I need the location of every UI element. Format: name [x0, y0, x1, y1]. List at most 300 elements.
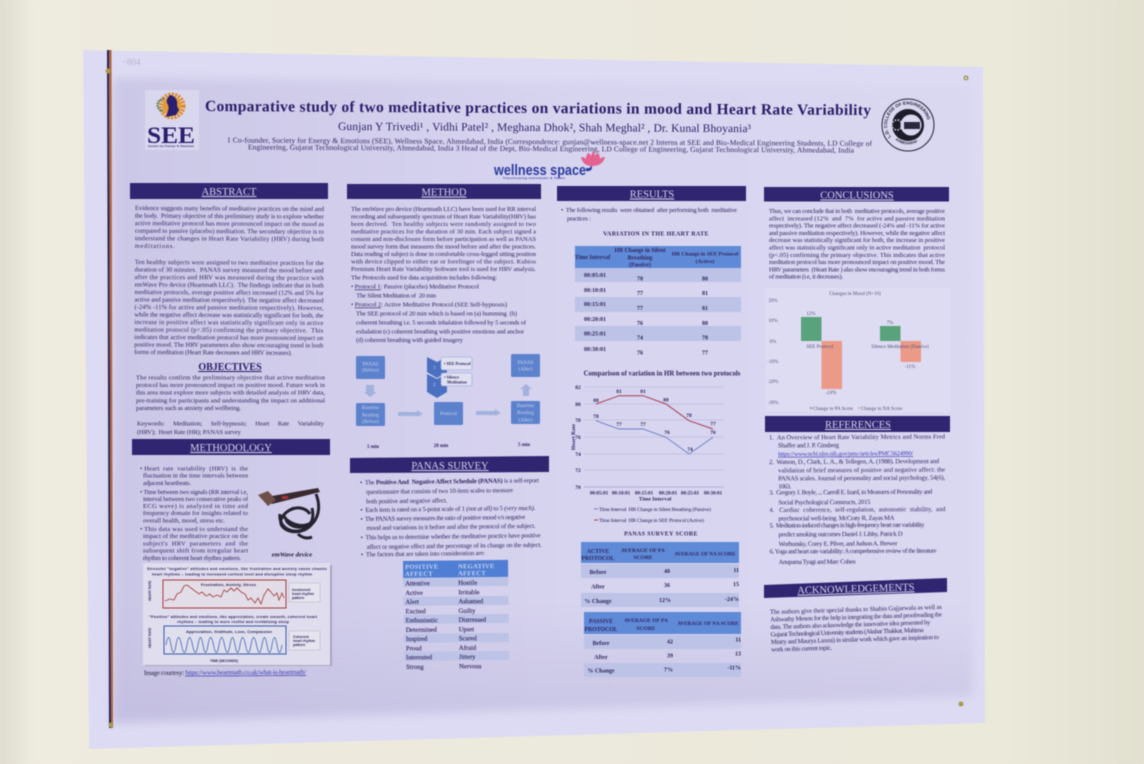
methodology bullets: • This data was used to understand the [140, 526, 248, 533]
chart: comparison of variation in HR: 00:20:01 [659, 492, 678, 496]
method text: meditative practices for the duration of 30 min. Each subject signed a [351, 228, 536, 236]
panel: acknowledgements [764, 578, 947, 653]
acknowledgements text: Ashwathy Menon for the help in integrating the data and proofreading the [770, 611, 942, 623]
table: passive protocol: AVERAGE OF PA [624, 618, 668, 624]
table: active protocol: 15 [733, 582, 739, 588]
heading: conclusions: CONCLUSIONS [820, 190, 894, 202]
PANAS bullets: • The PANAS survey measures the ratio of positive mood v/s negative [360, 514, 526, 523]
method text: The Protocols used for data acquisition includes following: [351, 274, 497, 282]
chart: changes in mood: -11% [905, 365, 915, 370]
flow diagram: protocol: 5 min [518, 443, 530, 448]
flow diagram: protocol: 5 min [367, 445, 379, 450]
references list: 1063. [778, 483, 792, 490]
table: positive and negative affect: Ashamed [458, 598, 484, 605]
abstract text: increase in positive affect was statistically significant only in active [134, 319, 324, 327]
chart: comparison of variation in HR: 81 [616, 389, 622, 395]
chart: changes in mood: Changes in Mood (N=10) [829, 292, 881, 297]
table: passive protocol: Before [593, 641, 610, 647]
heading: method [347, 184, 541, 199]
chart: changes in mood: -20% [768, 380, 778, 385]
objectives text: parameters such as anxiety and wellbeing. [136, 405, 241, 412]
table: active protocol: 40 [664, 569, 670, 575]
chart: changes in mood: -24% [826, 391, 836, 396]
heading: variation in heart rate: VARIATION IN THE HEART RATE [603, 232, 709, 238]
methodology bullets: fluctuation in the time intervals between [143, 472, 249, 480]
title: Comparative study of two meditative practices on variations in mood and Heart Rate Variability [205, 98, 871, 119]
chart: comparison of variation in HR: 77 [710, 422, 716, 428]
table: variation in the heart rate: 81 [702, 291, 708, 297]
figure: heart rhythm patterns: pattern [292, 596, 304, 600]
chart: comparison of variation in HR: 77 [616, 422, 622, 428]
chart: comparison of variation in HR: 80 [575, 402, 581, 408]
method text [351, 206, 537, 344]
table: variation in the heart rate: 00:05:01 [584, 273, 606, 279]
objectives text: (HRV); Heart Rate (HR); PANAS survey [137, 429, 242, 436]
table: passive protocol: % Change [587, 668, 615, 674]
references list: 2. Watson, D., Clark, L. A., & Tellegen, A. (1988). Development and [769, 458, 940, 466]
table: active protocol: 12% [659, 598, 671, 604]
table: positive and negative affect: Scared [459, 635, 477, 642]
figure: heart rhythm patterns: heart rhythm [292, 592, 314, 596]
abstract text: emWave Pro device (Heartmath LLC). The findings indicate that in both [135, 281, 324, 289]
table: positive and negative affect: Interested [406, 654, 433, 661]
PANAS bullets: questionnaire that consists of two 10-item scales to measure [366, 487, 513, 496]
heading: acknowledgements [764, 578, 947, 598]
flow diagram: protocol: • Silence [444, 374, 459, 380]
abstract text: forms of meditation (Heart Rate decreases and HRV increases). [134, 349, 293, 357]
table: variation in the heart rate: (Passive) [629, 262, 651, 268]
table: positive and negative affect: AFFECT [458, 570, 486, 577]
abstract text [134, 205, 325, 357]
objectives text: this area must explore more subjects with detailed analysis of HRV data, [136, 390, 325, 397]
chart: changes in mood: 10% [768, 319, 778, 324]
flow diagram: protocol: Reading [362, 414, 379, 418]
objectives text: protocol has more pronounced impact on positive mood. Future work in [136, 382, 326, 389]
table: positive and negative affect: Nervous [459, 663, 482, 670]
table: positive and negative affect: Excited [405, 608, 426, 615]
table: active protocol: % Change [584, 599, 612, 605]
panel: results [557, 186, 746, 677]
flow diagram: protocol: PANAS [518, 361, 534, 366]
table: passive protocol: After [594, 655, 608, 661]
abstract text: meditations. [135, 243, 175, 250]
flow diagram: protocol: • SEE Protocol [444, 361, 471, 366]
figure: heart rhythm patterns: rhythms – leading to more restful and revitalizing sleep [177, 620, 290, 624]
table: positive and negative affect: AFFECT [405, 571, 433, 578]
abstract text: Evidence suggests many benefits of meditative practices on the mind and [135, 205, 325, 213]
table: positive and negative affect: Enthusiastic [406, 617, 438, 624]
method text: recording and subsequently spectrum of Heart Rate Variability(HRV) has [351, 214, 536, 220]
flow diagram: protocol: 1 [433, 366, 436, 371]
table: positive and negative affect: Proud [406, 645, 422, 652]
references list: predict smoking outcomes Daniel J. Libby, Patrick D [778, 531, 903, 538]
acknowledgements text: data. The authors also acknowledge the innovative idea presented by [770, 619, 931, 631]
results intro [561, 207, 737, 222]
flow diagram: protocol: Baseline [362, 406, 380, 411]
poster sheet [83, 50, 985, 749]
chart: comparison of variation in HR: 76 [710, 430, 716, 436]
acknowledgements text: The authors give their special thanks to Shabin Gajjarwala as well as [770, 604, 942, 616]
figure: heart rhythm patterns: "Positive" attitudes and emotions, like appreciation, create smooth, coherent heart [149, 615, 318, 619]
table: positive and negative affect: Active [405, 590, 423, 597]
table: active protocol: AVERAGE OF PA [621, 548, 665, 554]
heading: PANAS survey: PANAS SURVEY [411, 461, 489, 472]
method text: • Protocol 2: Active Meditative Protocol (SEE Self-hypnosis) [351, 302, 507, 308]
references list: Social Psychological Constructs, 2015 [778, 499, 870, 506]
methodology bullets: • Heart rate variability (HRV) is the [140, 466, 248, 472]
references list: psychosocial well-being. McCraty R, Zayas MA [778, 515, 895, 522]
objectives text: The results confirm the preliminary objective that active meditation [136, 374, 326, 382]
methodology bullets: adjacent heartbeats. [143, 480, 191, 487]
table: passive protocol: -11% [727, 666, 741, 672]
abstract text: meditation protocol (p<.05) confirming the primary objective. This [134, 326, 324, 334]
caption: emWave device: emWave device [272, 552, 312, 558]
table: positive and negative affect: Determined [406, 627, 438, 634]
chart: comparison of variation in HR: 74 [575, 452, 581, 458]
table: positive and negative affect: Guilty [458, 608, 476, 615]
flow diagram: protocol: (Before) [362, 368, 379, 374]
table: positive and negative affect: NEGATIVE [458, 563, 495, 570]
abstract text: positive mood. The HRV parameters also show encouraging trend in both [134, 341, 324, 349]
flow diagram: protocol: (After) [519, 418, 533, 424]
figure: heart rhythm patterns: Stressful "negative" attitudes and emotions, like frustration and anxiety cause chaotic [147, 567, 327, 571]
table: variation in the heart rate: 00:25:01 [584, 332, 606, 338]
methodology bullets: interval between two consecutive peaks of [143, 496, 249, 503]
table: variation in the heart rate: 00:10:01 [584, 288, 606, 294]
heading: results: RESULTS [630, 190, 674, 200]
references list: Anupama Tyagi and Marc Cohen [779, 559, 856, 566]
chart: changes in mood: -30% [768, 401, 778, 406]
conclusions text: and passive meditation respectively). However, while the negative affect [769, 230, 945, 237]
chart: comparison of variation in HR: 76 [664, 430, 670, 436]
poster sheet: ~804 [122, 57, 141, 67]
table: variation in the heart rate: Breathing [628, 256, 652, 262]
panel: methodology [132, 439, 332, 677]
chart: comparison of variation in HR: 72 [575, 468, 581, 474]
conclusions text [769, 208, 946, 281]
heading: results [557, 186, 746, 201]
results intro: practices : [567, 216, 591, 222]
abstract text: Ten healthy subjects were assigned to two meditative practices for the [135, 259, 324, 267]
abstract text: duration of 30 minutes. PANAS survey measured the mood before and [135, 266, 324, 274]
figure: heart rhythm patterns: Frustration, Anxiety, Stress [201, 582, 257, 587]
table: positive and negative affect: Distressed [459, 617, 487, 624]
table: variation in the heart rate: 78 [702, 336, 708, 342]
acknowledgements text [770, 604, 944, 653]
abstract text: active meditative protocol has more pronounced impact on the mood as [135, 220, 324, 228]
chart: comparison of variation in HR: 80 [663, 398, 669, 404]
figure: heart rhythm patterns: TIME (SECONDS) [210, 659, 238, 663]
chart: changes in mood: 0% [770, 340, 776, 345]
method text: mood survey form that measures the mood before and after the practices. [351, 244, 536, 250]
conclusions text: of meditation (i.e, it decreases). [769, 274, 843, 281]
chart: comparison of variation in HR: 74 [687, 447, 693, 453]
table: variation in the heart rate: 77 [637, 291, 643, 297]
chart: changes in mood: SEE Protocol [806, 345, 834, 350]
chart: changes in mood: Change in PA Score [813, 407, 854, 412]
heading: acknowledgements: ACKNOWLEDGEMENTS [797, 582, 915, 597]
panel: conclusions [764, 187, 950, 412]
references list: validation of brief measures of positive and negative affect: the [778, 467, 945, 474]
chart: changes in mood: 20% [768, 299, 778, 304]
table: active protocol: 11 [733, 568, 739, 574]
table: positive and negative affect: Attentive [405, 580, 430, 587]
table: active protocol: SCORE [634, 555, 653, 561]
flow diagram: protocol: (After) [519, 368, 533, 372]
references list: 5. Meditation-induced changes in high-frequency heart rate variability [769, 522, 925, 529]
method text: coherent breathing i.e. 5 seconds inhalation followed by 5 seconds of [356, 320, 527, 326]
chart: comparison of variation in HR: 70 [575, 485, 581, 491]
flow diagram: protocol: Reading [517, 411, 534, 416]
methodology bullets [140, 466, 249, 562]
table: passive protocol: PROTOCOL [584, 627, 618, 633]
table: variation in the heart rate: 77 [702, 350, 708, 356]
figure: heart rhythm patterns: Coherent [293, 635, 310, 639]
chart: comparison of variation in HR [571, 370, 741, 524]
references list: PANAS scales. Journal of personality and social psychology, 54(6), [778, 475, 946, 482]
conclusions text: decrease was statistically significant for both, the increase in positive [769, 237, 945, 244]
flow diagram: protocol: 20 min [434, 444, 449, 449]
chart: changes in mood: Change in NA Score [861, 407, 903, 412]
acknowledgements text: Gujarat Technological University students (Akshar Thakkar, Mahima [771, 627, 924, 638]
abstract text: after the practices and HRV was measured during the practice with [135, 274, 324, 282]
chart: comparison of variation in HR: 80 [593, 398, 599, 404]
method text: exhalation (c) coherent breathing with positive emotions and anchor [356, 328, 525, 336]
table: active protocol: After [591, 584, 605, 590]
table: positive and negative affect: Irritable [458, 589, 480, 596]
table: passive protocol: 13 [735, 652, 741, 658]
method text: The SEE protocol of 20 min which is based on (a) humming (b) [356, 310, 517, 318]
conclusions text: affect was statistically significant only in active meditation protocol [769, 244, 945, 252]
table: variation in the heart rate: 81 [702, 306, 708, 312]
chart: comparison of variation in HR: 78 [575, 418, 581, 424]
figure: heart rhythm patterns: HEART RATE [148, 581, 152, 601]
logo: wellness space: wellness space [493, 163, 586, 179]
table: variation in the heart rate [575, 246, 741, 356]
photo: emWave device [258, 488, 320, 538]
methodology bullets: subject's HRV parameters and the [143, 540, 248, 548]
logo: wellness space: Transforming individuals & Teams [503, 176, 565, 180]
table: variation in the heart rate: 76 [637, 350, 643, 356]
logo: SEE society: SEE [147, 123, 195, 148]
method text: been derived. Ten healthy subjects were randomly assigned to two [351, 221, 536, 228]
chart: comparison of variation in HR: 00:05:01 [590, 492, 609, 496]
logo: SEE society: Society for Energy & Emotions [148, 144, 195, 148]
heading: objectives: OBJECTIVES [198, 362, 262, 373]
table: positive and negative affect: Alert [405, 599, 419, 606]
table: passive protocol: 11 [735, 638, 741, 644]
table: active protocol [581, 542, 739, 607]
chart: comparison of variation in HR: 00:15:01 [635, 492, 654, 496]
abstract text: meditative protocols, average positive affect increased (12% and 5% for [135, 289, 324, 297]
table: positive and negative affect: Hostile [458, 580, 477, 587]
PANAS bullets: • The Positive And Negative Affect Schedule (PANAS) is a self-report [360, 477, 539, 486]
affiliations: 1 Co-founder, Society for Energy & Emotions (SEE), Wellness Space, Ahmedabad, India (Correspondence: gunjan@wellness-space.net 2 Interns at SEE and Bio-Medical Engineering Students, LD College of [227, 136, 873, 148]
PANAS bullets: both positive and negative affect. [366, 497, 448, 505]
table: passive protocol [584, 612, 741, 677]
logo: LD College of Engineering: L.D. COLLEGE OF ENGINEERING [883, 100, 931, 139]
table: variation in the heart rate: 00:20:01 [584, 317, 606, 323]
table: active protocol: ACTIVE [587, 549, 609, 555]
table: positive and negative affect: Upset [459, 626, 474, 633]
heading: references: REFERENCES [825, 420, 891, 431]
conclusions text: meditation protocol has more pronounced impact on positive mood. The [769, 259, 945, 266]
conclusions text: HRV parameters (Heart Rate ) also show encouraging trend in both forms [769, 266, 945, 273]
heading: abstract [130, 183, 328, 199]
references list: 1. An Overview of Heart Rate Variability Metrics and Norms Fred [769, 434, 946, 441]
flow diagram: protocol: PANAS [363, 362, 379, 368]
table: variation in the heart rate: Time Interval [575, 255, 611, 261]
chart: comparison of variation in HR: 78 [593, 414, 599, 420]
authors: Gunjan Y Trivedi¹ , Vidhi Patel² , Meghana Dhok², Shah Meghal² , Dr. Kunal Bhoyania³ [338, 121, 752, 135]
method text: The Silent Meditation of 20 min [355, 292, 437, 300]
chart: changes in mood: -10% [768, 360, 778, 365]
references list: https://www.ncbi.nlm.nih.gov/pmc/articles/PMC5624990/ [778, 450, 913, 458]
flow diagram: protocol: Baseline [517, 404, 535, 409]
references list [769, 434, 946, 566]
conclusions text: respectively). The negative affect decreased (-24% and -11% for active [769, 223, 945, 230]
panel: method [347, 184, 541, 450]
methodology bullets: • Time between two signals (RR interval i.e, [140, 489, 248, 496]
table: active protocol: AVERAGE OF NA SCORE [674, 552, 736, 558]
panel: references [765, 416, 950, 566]
chart: comparison of variation in HR: Comparison of variation in HR between two protocols [584, 370, 741, 378]
affiliations: Engineering, Gujarat Technological University, Ahmedabad, India 3 Head of the Dept, Bio-Medical Engineering, LD College of Engineering, Gujarat Technological University, Ahmedabad, India [248, 143, 855, 155]
chart: comparison of variation in HR: 00:25:01 [681, 492, 700, 496]
flow diagram: protocol: (Before) [362, 420, 379, 425]
table: variation in the heart rate: 80 [702, 276, 708, 282]
figure: heart rhythm patterns: Appreciation, Gratitude, Love, Compassion [186, 629, 273, 634]
flow diagram: protocol: 2 [433, 383, 436, 388]
table: positive and negative affect: Afraid [459, 645, 477, 652]
abstract text: indicates that active meditation protocol has more pronounced impact on [134, 334, 324, 342]
table: variation in the heart rate: HR Change in SEE Protocol [672, 252, 739, 258]
table: variation in the heart rate: 76 [637, 321, 643, 327]
heading: method: METHOD [422, 188, 467, 198]
heading: abstract: ABSTRACT [202, 187, 257, 198]
table: positive and negative affect: Strong [406, 664, 424, 671]
conclusions text: affect increased (12% and 7% for active and passive meditation [769, 215, 946, 222]
chart: comparison of variation in HR: 00:30:01 [704, 492, 723, 496]
heading: conclusions [764, 187, 949, 202]
PANAS bullets [360, 477, 542, 558]
objectives text: pre-training for participants and understanding the impact on additional [136, 397, 325, 404]
abstract text: active and passive meditation respectively). The negative affect decreased [134, 296, 324, 304]
figure: heart rhythm patterns: heart rhythms – leading to increased cortisol level and disruptive sleep rhythm [152, 572, 313, 576]
method text: Data reading of subject is done in comfortable cross-legged sitting position [351, 251, 537, 258]
method text: consent and non-disclosure form before participation as well as PANAS [351, 236, 536, 243]
method text: with device clipped to either ear or forefinger of the subject. Kubios [351, 258, 536, 266]
method text: • Protocol 1: Passive (placebo) Meditative Protocol [351, 284, 479, 290]
figure: heart rhythm patterns: pattern [293, 643, 305, 647]
methodology bullets: ECG wave) is analyzed in time and [143, 503, 249, 510]
panel: PANAS survey [350, 456, 549, 671]
table: variation in the heart rate: 00:30:01 [584, 347, 606, 353]
chart: comparison of variation in HR: Heart Rate [571, 423, 577, 450]
table: passive protocol: AVERAGE OF NA SCORE [677, 621, 739, 627]
chart: comparison of variation in HR: Time Interval HR Change in SEE Protocol (Active) [599, 517, 704, 524]
method text: The emWave pro device (Heartmath LLC) have been used for RR interval [351, 206, 536, 213]
chart: comparison of variation in HR: 00:10:01 [612, 492, 631, 496]
abstract text: understand the changes in Heart Rate Variability (HRV) during both [135, 235, 325, 243]
chart: comparison of variation in HR: 81 [640, 389, 646, 395]
chart: changes in mood: 12% [806, 312, 816, 317]
table: positive and negative affect [403, 560, 509, 671]
methodology bullets: overall health, mood, stress etc. [143, 518, 225, 524]
abstract text: the body. Primary objective of this preliminary study is to explore whether [135, 213, 325, 221]
image courtesy: Image courtesy: https://www.heartmath.co.uk/what-is-heartmath/ [144, 669, 306, 677]
table: passive protocol: 39 [667, 654, 673, 660]
logo: wellness space [493, 151, 605, 180]
table: passive protocol: 42 [667, 640, 673, 646]
chart: changes in mood: Silence Meditation (Passive) [871, 345, 929, 350]
methodology bullets: impact of the meditative practice on the [143, 533, 248, 540]
logo: SEE society [145, 90, 199, 150]
abstract text: while the negative affect decrease was statistically significant for both, the [134, 311, 324, 319]
methodology bullets: frequency domain for insights related to [143, 510, 248, 517]
table: variation in the heart rate: 74 [637, 336, 643, 342]
table: active protocol: -24% [725, 597, 739, 603]
references list: 4. Cardiac coherence, self-regulation, autonomic stability, and [769, 506, 946, 514]
heading: PANAS survey [350, 456, 549, 473]
PANAS bullets: mood and variations in it before and after the protocol of the subject. [367, 523, 536, 532]
results intro: • The following results were obtained after performing both meditative [561, 207, 737, 214]
flow diagram: protocol: Protocol [440, 412, 458, 417]
table: passive protocol: 7% [664, 668, 673, 674]
figure: heart rhythm patterns: heart rhythm [293, 639, 315, 643]
method text: (d) coherent breathing with guided imagery [356, 337, 464, 344]
PANAS bullets: affect or negative effect and the percentage of its change on the subject. [367, 542, 542, 551]
abstract text: compared to passive (placebo) meditation. The secondary objective is to [135, 228, 324, 236]
table: active protocol: PROTOCOL [581, 556, 615, 562]
acknowledgements text: work on this current topic. [771, 645, 833, 653]
objectives text [136, 374, 326, 436]
table: variation in the heart rate: HR Change in Silent [614, 248, 666, 254]
flow diagram: protocol [356, 354, 540, 450]
acknowledgements text: Mistry and Maurya Laxmi) in similar work which gave an inspiration to [771, 634, 939, 646]
heading: references [765, 416, 950, 432]
PANAS bullets: • The factors that are taken into consideration are: [361, 550, 485, 558]
chart: comparison of variation in HR: Time Interval HR Change in Silent Breathing (Passive) [599, 506, 711, 513]
flow diagram: protocol: Meditation [447, 380, 467, 384]
PANAS bullets: • Each item is rated on a 5-point scale of 1 (not at all) to 5 (very much). [360, 505, 536, 514]
conclusions text: (p<.05) confirming the primary objective. This indicates that active [769, 252, 945, 259]
references list: 3. Gregory J. Boyle, ... Carroll E. Izard, in Measures of Personality and [769, 489, 933, 496]
heading: PANAS survey score: PANAS SURVEY SCORE [624, 532, 698, 538]
references list: Shaffer and J. P. Ginsberg [778, 442, 840, 449]
table: positive and negative affect: POSITIVE [405, 564, 439, 571]
figure: heart rhythm patterns [143, 563, 332, 666]
objectives text: Keywords: Meditation; Self-hypnosis; Heart Rate Variability [137, 420, 325, 428]
heading: methodology [132, 439, 330, 455]
panel: abstract [130, 183, 328, 357]
table: active protocol: Before [590, 570, 607, 576]
logo: LD College of Engineering: AHMEDABAD [895, 138, 918, 145]
affiliations [227, 136, 873, 155]
methodology bullets: subsequent shift from irregular heart [143, 548, 248, 554]
table: variation in the heart rate: 00:15:01 [584, 302, 606, 308]
methodology bullets: rhythm to coherent heart rhythm pattern. [143, 555, 241, 562]
table: passive protocol: PASSIVE [589, 619, 613, 625]
panel: objectives [136, 362, 326, 436]
chart: changes in mood: 7% [887, 321, 893, 326]
abstract text: (-24% -11% for active and passive meditation respectively). However, [134, 304, 324, 312]
figure: heart rhythm patterns: Incoherent [292, 588, 311, 592]
chart: comparison of variation in HR: Time Interval [639, 496, 672, 502]
chart: comparison of variation in HR: 76 [575, 435, 581, 441]
method text: Premium Heart Rate Variability Software tool is used for HRV analysis. [351, 266, 536, 273]
table: positive and negative affect: Inspired [406, 636, 428, 643]
